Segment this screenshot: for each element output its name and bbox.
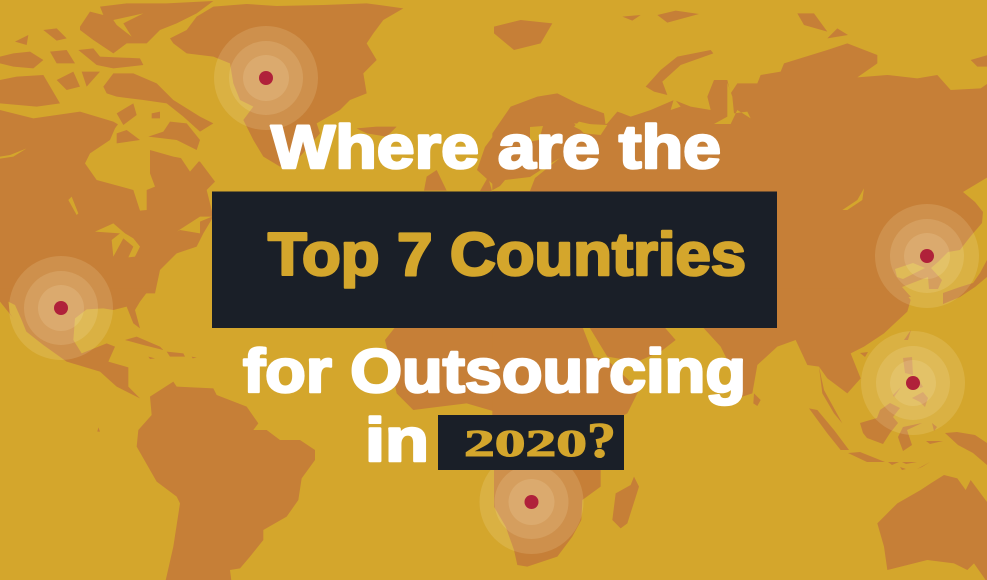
heading panel: dark box (212, 192, 777, 328)
heading: for Outsourcing: for Outsourcing (243, 337, 746, 406)
heading: in: in (365, 406, 429, 475)
location marker: Philippines (861, 331, 965, 435)
map: south-west quadrant (Mexico, South America, West Africa) (0, 288, 495, 580)
year: 2020? (464, 412, 616, 468)
year: 2020?: 2020 (464, 423, 587, 465)
heading: Top 7 Countries: Top 7 Countries (268, 221, 746, 288)
map: north-west quadrant (North America, Greenland) (0, 1, 447, 293)
map: north-east quadrant (Russia, China) (492, 11, 987, 297)
year: 2020?: ? (587, 412, 616, 468)
location marker: Mexico (9, 256, 113, 360)
location marker: South Africa (480, 450, 584, 554)
heading: Where are the: Where are the (271, 113, 721, 182)
map: south-east quadrant (Africa, Asia, Australia) (492, 288, 987, 580)
year panel: dark box (438, 415, 624, 470)
map: Scandinavia, Baltic and Bohai details (477, 127, 925, 279)
map: Japan (943, 260, 987, 304)
map: South-East Asia islands (848, 330, 987, 470)
location marker: China (875, 204, 979, 308)
location marker: Canada / Greenland (214, 26, 318, 130)
